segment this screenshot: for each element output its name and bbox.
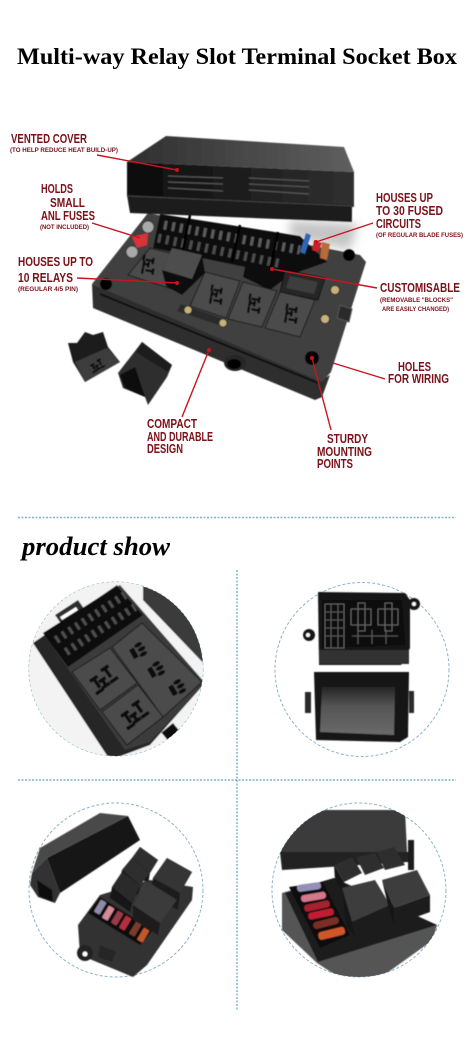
callout: vented cover: VENTED COVER <box>11 132 87 146</box>
callout: ANL fuses: ANL FUSES <box>41 209 95 223</box>
cover <box>127 136 354 222</box>
callout: mounting points: STURDY <box>327 432 369 446</box>
callout: relays: (REGULAR 4/5 PIN) <box>18 286 78 293</box>
callout: fused circuits: (OF REGULAR BLADE FUSES) <box>376 232 463 239</box>
callout: customisable <box>270 267 460 313</box>
photo circle: box with cover beside it <box>29 803 203 977</box>
callout: ANL fuses: HOLDS <box>41 182 73 196</box>
photo circle: top view of sockets <box>25 580 210 760</box>
callout: vented cover: (TO HELP REDUCE HEAT BUILD-UP) <box>10 147 118 154</box>
callout: mounting points: MOUNTING <box>317 445 372 459</box>
relay <box>162 248 205 295</box>
callout: holes for wiring: HOLES <box>398 360 431 374</box>
loose relay block 1 <box>68 332 120 382</box>
callout: relays <box>18 255 179 293</box>
ANL fuse <box>126 221 154 258</box>
callout: ANL fuses <box>40 182 140 238</box>
callout: mounting points: POINTS <box>317 457 353 471</box>
callout: holes for wiring <box>333 360 449 386</box>
base box <box>92 213 366 400</box>
relay socket panels <box>128 248 315 337</box>
callout: customisable: (REMOVABLE "BLOCKS" <box>380 297 453 304</box>
callout: fused circuits: CIRCUITS <box>376 217 421 231</box>
photo circle: open box and cover <box>275 582 449 756</box>
heading: product show: product show <box>20 532 171 561</box>
wiring hole <box>224 355 246 371</box>
callout: customisable: ARE EASILY CHANGED) <box>382 306 449 313</box>
product photo: fuse box with callouts <box>68 136 366 405</box>
callout: fused circuits <box>314 191 463 244</box>
callout: compact and durable: DESIGN <box>147 442 183 456</box>
callout: mounting points <box>310 356 372 471</box>
title: Multi-way Relay Slot Terminal Socket Box <box>17 44 458 69</box>
callout: fused circuits: HOUSES UP <box>376 191 433 205</box>
callout: relays: HOUSES UP TO <box>18 255 93 269</box>
brass inserts <box>184 286 340 327</box>
fuse block <box>153 214 327 300</box>
callout: vented cover <box>10 132 179 172</box>
callout: fused circuits: TO 30 FUSED <box>376 204 443 218</box>
callout: compact and durable: AND DURABLE <box>147 430 213 444</box>
callout: holes for wiring: FOR WIRING <box>388 372 449 386</box>
callout: ANL fuses: (NOT INCLUDED) <box>40 224 89 231</box>
shadow under cover <box>290 220 358 250</box>
blade fuses <box>300 233 330 260</box>
mounting holes <box>100 278 112 290</box>
callout: compact and durable <box>147 348 213 456</box>
photo circle: close-up of relays and fuses <box>272 803 446 978</box>
callout: compact and durable: COMPACT <box>147 417 197 431</box>
loose relay block 2 <box>118 342 172 405</box>
callout: relays: 10 RELAYS <box>18 271 73 285</box>
callout: ANL fuses: SMALL <box>50 196 85 210</box>
